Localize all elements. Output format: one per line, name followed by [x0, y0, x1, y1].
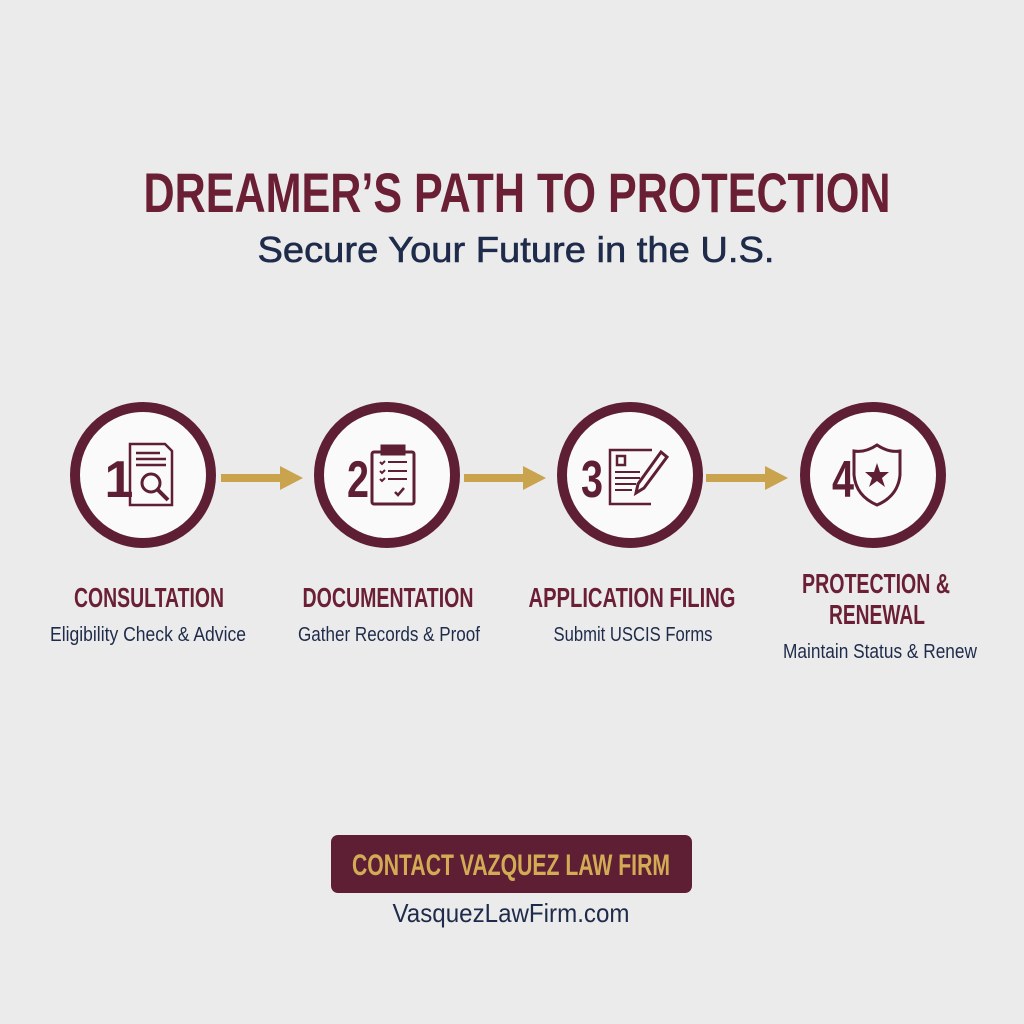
- label: consultation: [50, 582, 246, 646]
- label: documentation: [298, 582, 480, 646]
- contact button: CONTACT VAZQUEZ LAW FIRM: [352, 849, 670, 882]
- label: documentation: Gather Records & Proof: [298, 624, 480, 646]
- step 1 circle: 1: [105, 451, 133, 509]
- icon: shield with star: [854, 445, 900, 505]
- label: documentation: DOCUMENTATION: [302, 582, 474, 613]
- label: application filing: [528, 582, 736, 646]
- step 1 circle: [75, 407, 211, 543]
- label: protection & renewal: [783, 568, 977, 663]
- label: protection & renewal: RENEWAL: [829, 599, 925, 630]
- step 4 circle: [805, 407, 941, 543]
- arrow 2: [464, 466, 546, 490]
- label: consultation: Eligibility Check & Advice: [50, 624, 246, 646]
- label: application filing: Submit USCIS Forms: [554, 624, 712, 646]
- step 3 circle: 3: [581, 451, 603, 509]
- step 2 circle: [319, 407, 455, 543]
- website url: VasquezLawFirm.com: [392, 898, 630, 928]
- label: application filing: APPLICATION FILING: [528, 582, 736, 613]
- icon: document with magnifier: [130, 444, 172, 505]
- step 3 circle: [562, 407, 698, 543]
- arrow 1: [221, 466, 303, 490]
- label: protection & renewal: Maintain Status & Renew: [783, 641, 977, 663]
- label: consultation: CONSULTATION: [74, 582, 224, 613]
- step 4 circle: 4: [832, 451, 854, 509]
- icon: clipboard checklist: [372, 446, 414, 504]
- label: protection & renewal: PROTECTION &: [802, 568, 950, 599]
- icon: form with pen: [610, 450, 667, 504]
- subtitle: Secure Your Future in the U.S.: [258, 229, 774, 270]
- contact button: [331, 835, 692, 893]
- arrow 3: [706, 466, 788, 490]
- step 2 circle: 2: [347, 451, 369, 509]
